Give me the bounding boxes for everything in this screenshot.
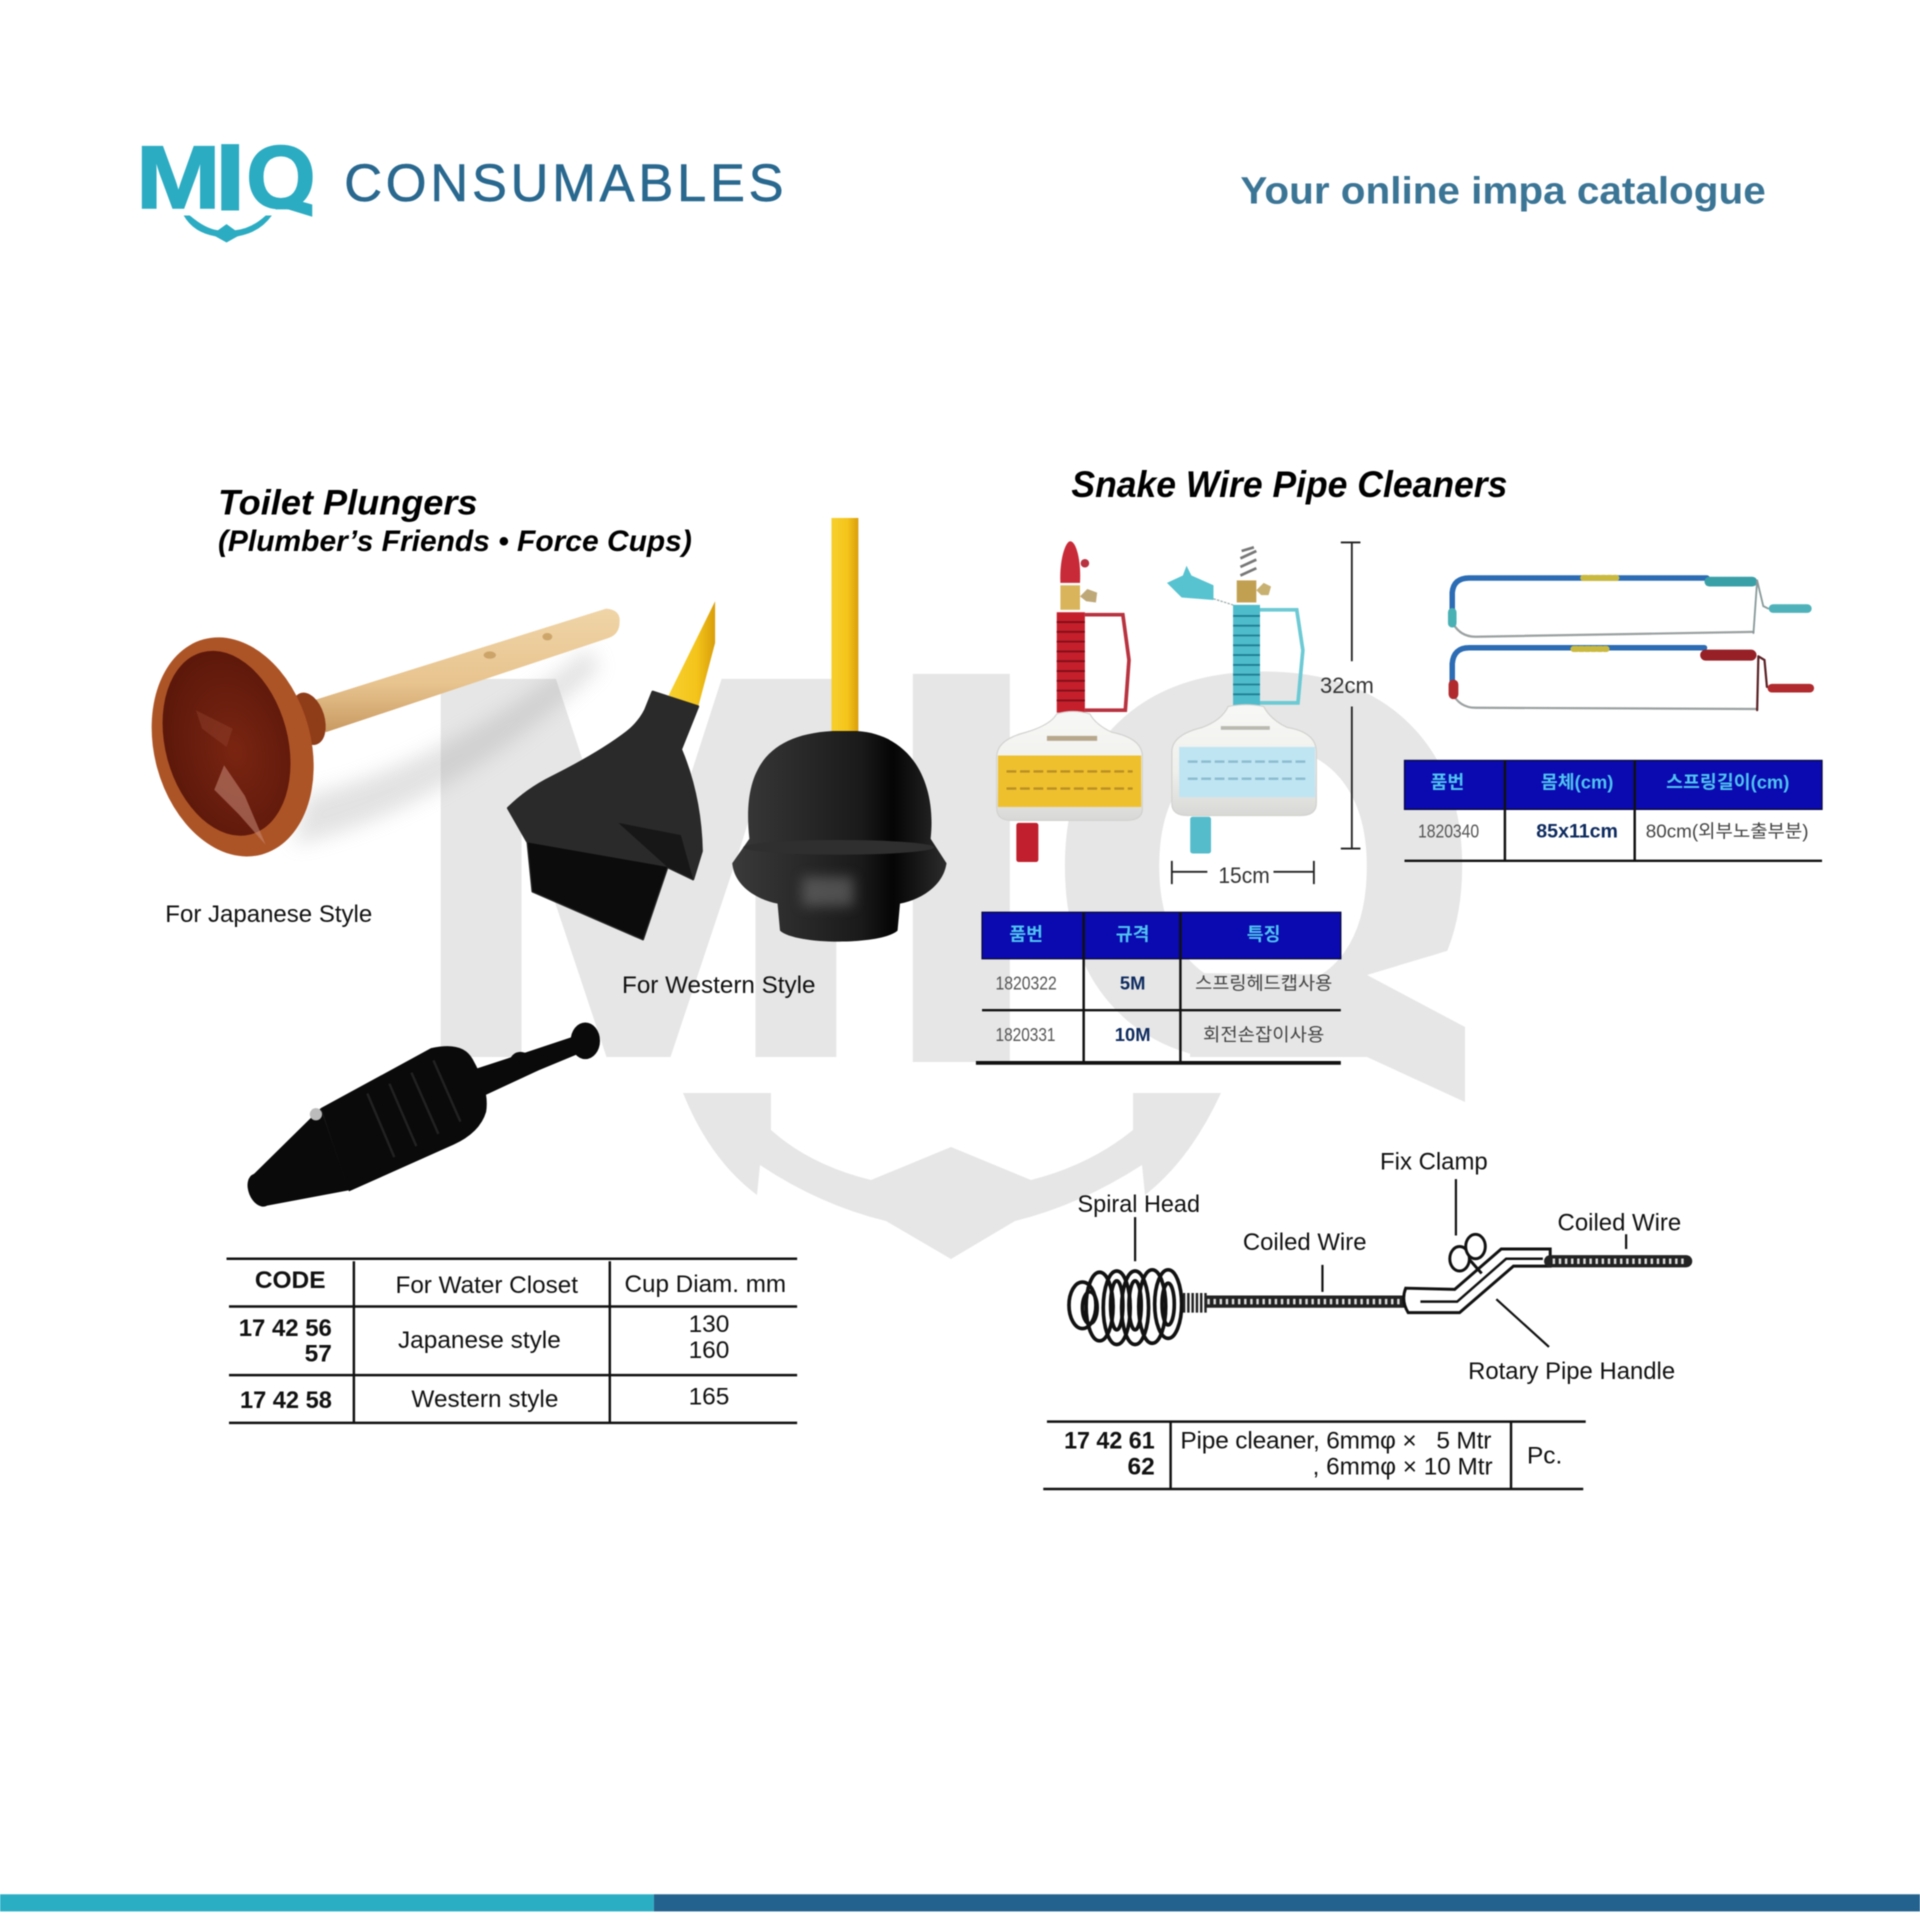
icon: blue pipe cleaner bottle bbox=[1167, 547, 1316, 853]
table: korean spec small: 스프링헤드캡사용 bbox=[1195, 972, 1332, 993]
table: korean spec small: 품번 bbox=[1009, 923, 1043, 944]
coiled wire end bbox=[1550, 1256, 1686, 1266]
table: plunger codes: For Water Closet bbox=[396, 1272, 578, 1299]
table: plunger codes: 17 42 56 bbox=[239, 1315, 332, 1342]
table: korean spec small: 규격 bbox=[1116, 923, 1150, 944]
leader lines bbox=[1135, 1179, 1626, 1347]
spiral head coil bbox=[1069, 1270, 1182, 1344]
table: pipe cleaner codes: , 6mmφ × 10 Mtr bbox=[1313, 1453, 1493, 1480]
table: pipe cleaner codes: Pipe cleaner, 6mmφ × 5 Mtr bbox=[1180, 1428, 1491, 1455]
table: korean spec small: 10M bbox=[1115, 1024, 1151, 1045]
table: plunger codes: 130 bbox=[689, 1311, 729, 1338]
icon: western plunger angled bbox=[508, 601, 715, 939]
icon: red wire frame cleaner bbox=[1452, 648, 1810, 710]
table: plunger codes: Japanese style bbox=[398, 1327, 561, 1354]
table: pipe cleaner codes: Pc. bbox=[1527, 1442, 1562, 1469]
dimension: 15cm width: 15cm bbox=[1218, 863, 1270, 888]
footer bar bbox=[0, 1894, 1920, 1911]
table: korean spec wire frame: 1820340 bbox=[1418, 821, 1479, 842]
dimension: 32cm height: 32cm bbox=[1320, 673, 1374, 698]
logo wordmark MIQ: Q bbox=[246, 127, 316, 227]
table: korean spec wire frame bbox=[1404, 760, 1822, 861]
table: korean spec small: 5M bbox=[1120, 972, 1145, 993]
table: plunger codes: 17 42 58 bbox=[240, 1387, 332, 1414]
table: korean spec wire frame: 스프링길이(cm) bbox=[1666, 772, 1789, 793]
logo anchor arc bbox=[184, 198, 312, 242]
table: korean spec small: 1820322 bbox=[996, 972, 1057, 993]
table: pipe cleaner codes bbox=[1043, 1422, 1586, 1489]
heading: toilet plungers bbox=[218, 482, 692, 558]
table: plunger codes: Cup Diam. mm bbox=[624, 1271, 786, 1298]
threaded collar bbox=[1183, 1295, 1207, 1311]
table: plunger codes: CODE bbox=[255, 1267, 326, 1294]
icon: western plunger upright bbox=[732, 518, 947, 942]
icon: blue wire frame cleaner bbox=[1452, 578, 1807, 637]
table: pipe cleaner codes: 17 42 61 bbox=[1064, 1428, 1155, 1455]
watermark: MIQ logo: I bbox=[887, 569, 1036, 1166]
watermark: MIQ logo: M bbox=[409, 568, 868, 1166]
tagline: Your online impa catalogue bbox=[1240, 170, 1766, 212]
table: plunger codes: Western style bbox=[411, 1386, 558, 1413]
table: pipe cleaner codes: 62 bbox=[1127, 1453, 1155, 1480]
icon: bellows plunger bbox=[243, 1022, 600, 1210]
table: korean spec wire frame: 품번 bbox=[1430, 772, 1464, 793]
table: korean spec small: 특징 bbox=[1247, 923, 1281, 944]
table: korean spec wire frame: 80cm(외부노출부분) bbox=[1646, 821, 1809, 842]
logo wordmark MIQ bbox=[141, 143, 314, 212]
heading: snake wire pipe cleaners: Snake Wire Pipe Cleaners bbox=[1071, 464, 1507, 505]
header logo bbox=[141, 143, 782, 243]
part labels: Coiled Wire bbox=[1558, 1210, 1681, 1237]
part labels: Fix Clamp bbox=[1380, 1148, 1488, 1175]
part labels bbox=[1078, 1148, 1681, 1385]
dimension: 15cm width bbox=[1172, 861, 1314, 888]
part labels: Spiral Head bbox=[1078, 1191, 1200, 1218]
logo wordmark MIQ: M bbox=[136, 128, 221, 228]
heading: toilet plungers: Toilet Plungers bbox=[218, 482, 478, 522]
heading: toilet plungers: (Plumber’s Friends • Force Cups) bbox=[218, 525, 692, 558]
table: korean spec wire frame: 85x11cm bbox=[1536, 821, 1618, 843]
fix clamp bbox=[1450, 1234, 1485, 1273]
diagram: pipe cleaner parts bbox=[1069, 1148, 1686, 1385]
label: for Japanese style: For Japanese Style bbox=[165, 901, 372, 928]
part labels: Coiled Wire bbox=[1243, 1229, 1367, 1256]
watermark: MIQ logo: Q bbox=[1050, 568, 1478, 1166]
logo text CONSUMABLES: CONSUMABLES bbox=[344, 154, 784, 213]
table: korean spec small: 회전손잡이사용 bbox=[1203, 1024, 1324, 1045]
table: korean spec small bbox=[976, 912, 1341, 1063]
watermark: MIQ logo bbox=[409, 568, 1478, 1259]
table: plunger codes: 165 bbox=[689, 1383, 729, 1410]
label: for Western style: For Western Style bbox=[622, 972, 816, 999]
icon: Japanese style plunger bbox=[128, 609, 620, 875]
dimension: 32cm height bbox=[1320, 542, 1374, 849]
icon: red pipe cleaner bottle bbox=[997, 541, 1142, 862]
rotary pipe handle bbox=[1404, 1249, 1550, 1313]
table: korean spec wire frame: 몸체(cm) bbox=[1541, 772, 1613, 793]
table: korean spec small: 1820331 bbox=[996, 1024, 1056, 1045]
part labels: Rotary Pipe Handle bbox=[1468, 1358, 1675, 1385]
logo wordmark MIQ: I bbox=[218, 127, 243, 227]
table: plunger codes: 160 bbox=[689, 1337, 729, 1364]
table: plunger codes bbox=[227, 1259, 797, 1423]
coiled wire shaft bbox=[1205, 1297, 1406, 1307]
table: plunger codes: 57 bbox=[305, 1341, 332, 1368]
